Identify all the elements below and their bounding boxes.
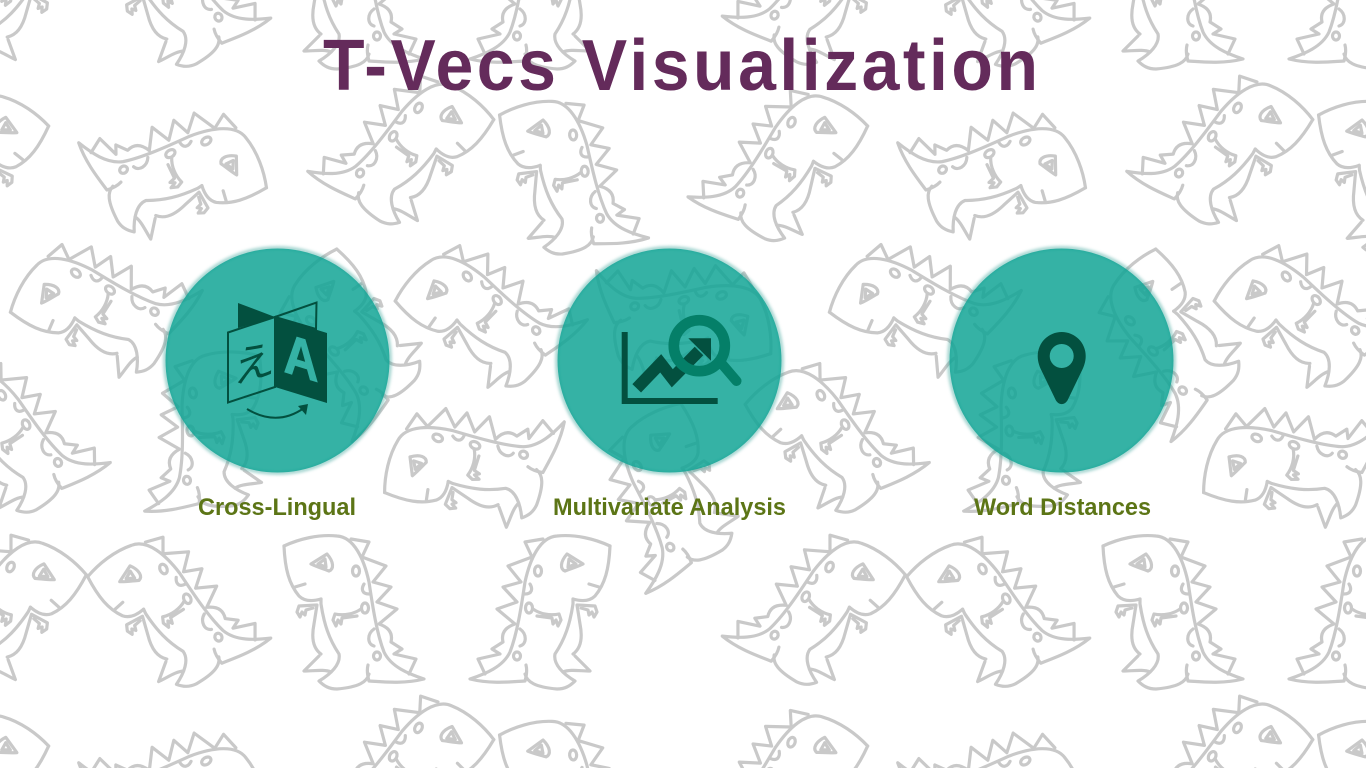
- circle: multivariate background: [558, 248, 782, 472]
- icon: translation book: [228, 302, 327, 418]
- title: T-Vecs Visualization: [323, 25, 1038, 105]
- icon: translation book: え: [233, 334, 275, 394]
- label: cross-lingual: Cross-Lingual: [198, 494, 356, 521]
- label: multivariate analysis: Multivariate Analysis: [553, 494, 786, 521]
- panel: word distances: [949, 248, 1174, 521]
- circle: cross-lingual background: [166, 248, 390, 472]
- circle: word distances background: [950, 248, 1174, 472]
- panel: cross-lingual: [165, 248, 390, 521]
- icon: chart with magnifier: [622, 320, 736, 404]
- icon: translation book: A: [284, 322, 318, 395]
- panel: multivariate analysis: [553, 248, 786, 521]
- label: word distances: Word Distances: [974, 494, 1151, 521]
- icon: map pin: [1038, 332, 1086, 404]
